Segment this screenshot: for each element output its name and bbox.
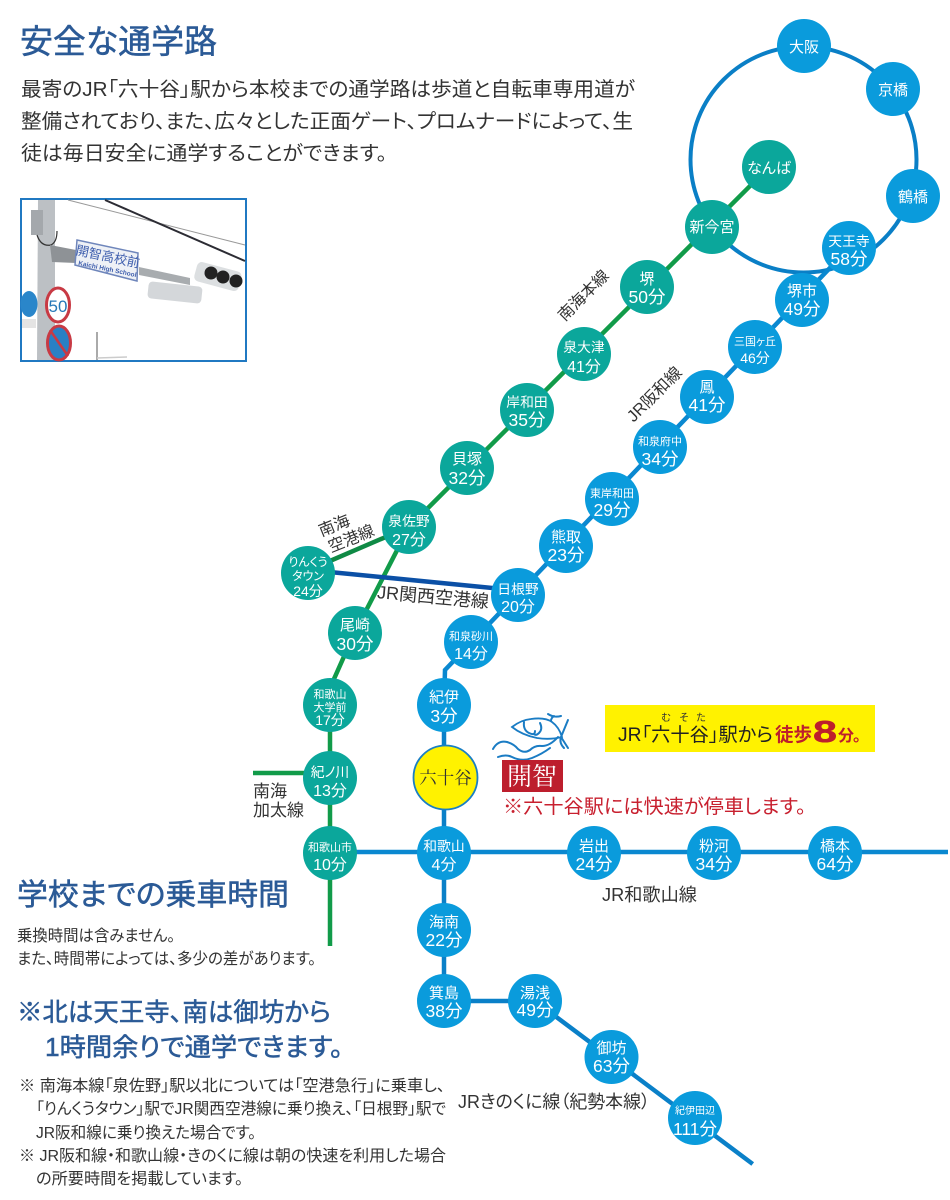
- station Wakayama: 和歌山: [423, 839, 465, 854]
- line label: Nankai airport line: 南海: [316, 512, 353, 540]
- station Wakayama University: 17分: [315, 712, 345, 728]
- logo text: Kaichi: [502, 760, 563, 792]
- station Gobo: [584, 1030, 638, 1084]
- station Minoshima: 38分: [426, 1001, 463, 1021]
- station Kinokawa: [303, 751, 357, 805]
- JR Osaka loop line ring: [690, 46, 916, 272]
- station Kii: [417, 678, 471, 732]
- station Yuasa: 湯浅: [520, 985, 550, 1002]
- photo: school crossing signal: [20, 199, 246, 361]
- station Sakaishi: 堺市: [787, 283, 817, 300]
- station Tennoji: [822, 221, 876, 275]
- intro text block: 整備されており、また、広々とした正面ゲート、プロムナードによって、生: [21, 110, 633, 133]
- station Kishiwada: 35分: [509, 410, 546, 430]
- station Sakaishi: [775, 273, 829, 327]
- station Wakayama University: 大学前: [314, 700, 346, 714]
- line label: JR Kinokuni line: JRきのくに線（紀勢本線）: [458, 1092, 650, 1112]
- station Izumiotsu: 41分: [567, 358, 601, 376]
- station Wakayama: 4分: [432, 856, 456, 874]
- station Higashikishiwada: 東岸和田: [590, 487, 634, 500]
- station Kumatori: 23分: [548, 545, 585, 565]
- station Wakayama University: 和歌山: [314, 688, 346, 701]
- station Sakai: 堺: [639, 271, 655, 288]
- station Ozaki: [328, 606, 382, 660]
- line label: JR Wakayama line: JR和歌山線: [602, 885, 697, 905]
- station Kaizuka: [440, 441, 494, 495]
- station Izumifuchu: [633, 420, 687, 474]
- station Osaka: 大阪: [789, 39, 819, 56]
- station Kyobashi: [866, 62, 920, 116]
- station Wakayama: [417, 826, 471, 880]
- station Shin-Imamiya: 新今宮: [689, 219, 735, 236]
- station Kumatori: 熊取: [551, 529, 581, 546]
- text: riding time disclaimer: 乗換時間は含みません。: [17, 927, 175, 945]
- station Ozaki: 30分: [337, 634, 374, 654]
- station Iwade: 24分: [576, 854, 613, 874]
- line label: Nankai main line: 南海本線: [555, 267, 613, 325]
- intro text block: [21, 78, 635, 165]
- station Izumisunagawa: 14分: [454, 645, 488, 663]
- station Mikunigaoka: 46分: [740, 350, 770, 366]
- station Otori: 鳳: [699, 379, 715, 396]
- station Namba: なんば: [747, 160, 791, 177]
- station Hineno: 日根野: [497, 582, 539, 597]
- line label: JR Kansai airport line: JR関西空港線: [376, 582, 490, 612]
- station Iwade: [567, 826, 621, 880]
- callout: 8-minute walk: 分: [838, 727, 854, 745]
- station Kii-Tanabe: 紀伊田辺: [675, 1104, 715, 1117]
- station Izumisunagawa: 和泉砂川: [449, 629, 493, 643]
- callout: 8-minute walk: 徒歩: [775, 724, 812, 746]
- station Kainan: 22分: [426, 930, 463, 950]
- intro text block: 最寄のJR「六十谷」駅から本校までの通学路は歩道と自転車専用道が: [21, 78, 635, 101]
- station Rinku Town: りんくう: [288, 555, 328, 569]
- station Izumisano: [382, 500, 436, 554]
- station Izumiotsu: [557, 327, 611, 381]
- station Izumifuchu: 和泉府中: [638, 434, 682, 448]
- station Kaizuka: 32分: [449, 468, 486, 488]
- JR Hanwa line: [444, 248, 849, 705]
- station Kishiwada: [500, 383, 554, 437]
- title: safe school route: 安全な通学路: [20, 23, 217, 60]
- footnotes: の所要時間を掲載しています。: [36, 1170, 243, 1188]
- station Iwade: 岩出: [579, 838, 609, 855]
- callout: 8-minute walk: た: [696, 712, 706, 724]
- station Kumatori: [539, 519, 593, 573]
- station Kaizuka: 貝塚: [452, 451, 482, 468]
- footnotes: ※ 南海本線「泉佐野」駅以北については「空港急行」に乗車し、: [19, 1076, 445, 1095]
- station Kii: 3分: [430, 706, 458, 726]
- station Shin-Imamiya: [685, 200, 739, 254]
- Nankai airport line: [309, 527, 409, 570]
- heading: riding time to school: 学校までの乗車時間: [17, 879, 289, 912]
- station Sakaishi: 49分: [784, 299, 821, 319]
- station Tsuruhashi: [886, 169, 940, 223]
- station Otori: 41分: [689, 395, 726, 415]
- callout: 8-minute walk: [605, 705, 875, 752]
- station Gobo: 御坊: [596, 1040, 627, 1057]
- station Higashikishiwada: 29分: [594, 500, 631, 520]
- heading: commute within about an hour: ※北は天王寺、南は御坊から: [17, 999, 331, 1027]
- callout: 8-minute walk: む: [661, 712, 671, 724]
- station Wakayamashi: [303, 826, 357, 880]
- photo: school crossing signal: Kaichi High School: [78, 260, 137, 279]
- station Wakayamashi: 和歌山市: [308, 841, 352, 854]
- station Namba: [742, 140, 796, 194]
- station Kii-Tanabe: 111分: [673, 1119, 718, 1139]
- line label: JR Hanwa line: JR阪和線: [623, 363, 686, 426]
- station Kokawa: 34分: [696, 854, 733, 874]
- station Kokawa: 粉河: [699, 838, 729, 855]
- station Tsuruhashi: 鶴橋: [898, 189, 928, 206]
- station Izumisunagawa: [444, 615, 498, 669]
- station Sakai: 50分: [629, 287, 666, 307]
- heading: commute within about an hour: 1時間余りで通学できます。: [45, 1034, 343, 1062]
- footnotes: JR阪和線に乗り換えた場合です。: [36, 1124, 256, 1142]
- callout: 8-minute walk: そ: [679, 712, 689, 724]
- station Kainan: [417, 903, 471, 957]
- station Kyobashi: 京橋: [878, 82, 908, 99]
- footnotes: ※ JR阪和線・和歌山線・きのくに線は朝の快速を利用した場合: [19, 1147, 446, 1165]
- JR Kansai airport line: [309, 570, 518, 590]
- note: rapid service stops at Musota: ※六十谷駅には快速が停車します。: [503, 796, 806, 818]
- station Otori: [680, 370, 734, 424]
- station Minoshima: 箕島: [429, 985, 459, 1002]
- station Izumifuchu: 34分: [642, 449, 679, 469]
- callout: 8-minute walk: 8: [813, 714, 837, 749]
- station Izumisano: 27分: [392, 531, 426, 549]
- station Rinku Town: [281, 546, 335, 600]
- stations: JR blue: [417, 19, 940, 1145]
- text: riding time disclaimer: また、時間帯によっては、多少の差があります。: [17, 950, 316, 968]
- station Higashikishiwada: [585, 472, 639, 526]
- footnotes: 「りんくうタウン」駅でJR関西空港線に乗り換え、「日根野」駅で: [36, 1100, 446, 1118]
- station Sakai: [620, 260, 674, 314]
- station Kinokawa: 紀ノ川: [311, 765, 349, 780]
- station Mikunigaoka: [728, 320, 782, 374]
- station Hineno: 20分: [501, 598, 535, 616]
- station Hineno: [491, 568, 545, 622]
- footnotes: [19, 1076, 446, 1188]
- station Kokawa: [687, 826, 741, 880]
- Nankai Kada line: [253, 771, 330, 775]
- rail network lines: [253, 46, 948, 1164]
- station Kinokawa: 13分: [313, 782, 347, 800]
- station Rinku Town: タウン: [292, 569, 325, 583]
- station Rinku Town: 24分: [293, 583, 323, 599]
- station Gobo: 63分: [593, 1056, 630, 1076]
- JR Hanwa and Kinokuni main line: [444, 705, 753, 1164]
- station Kii: 紀伊: [429, 689, 459, 706]
- heading: commute within about an hour: [17, 999, 343, 1062]
- photo: school crossing signal: 開智高校前: [75, 243, 141, 271]
- station Kainan: 海南: [429, 914, 459, 931]
- station Kii-Tanabe: [668, 1091, 722, 1145]
- intro text block: 徒は毎日安全に通学することができます。: [21, 142, 387, 165]
- station Hashimoto: [808, 826, 862, 880]
- logo: Kaichi emblem: [493, 714, 568, 760]
- station Wakayamashi: 10分: [313, 856, 347, 874]
- station Yuasa: [508, 974, 562, 1028]
- stations: Nankai teal: [281, 140, 796, 880]
- station Hashimoto: 64分: [817, 854, 854, 874]
- logo text: Kaichi: 開智: [507, 763, 557, 791]
- station Izumisano: 泉佐野: [388, 513, 430, 529]
- station Kishiwada: 岸和田: [506, 395, 548, 410]
- station Izumiotsu: 泉大津: [563, 339, 605, 355]
- station Osaka: [777, 19, 831, 73]
- station Ozaki: 尾崎: [340, 617, 370, 634]
- station Hashimoto: 橋本: [820, 838, 850, 855]
- station Yuasa: 49分: [517, 1000, 554, 1020]
- station Musota highlight: 六十谷: [419, 768, 472, 788]
- station Tennoji: 天王寺: [828, 234, 870, 249]
- station Wakayama University: [303, 678, 357, 732]
- station Musota highlight: [414, 746, 478, 810]
- line label: Nankai airport line: [316, 512, 377, 556]
- Nankai main line: [330, 167, 769, 946]
- callout: 8-minute walk: JR「六十谷」駅から: [618, 724, 773, 746]
- station Mikunigaoka: 三国ヶ丘: [734, 335, 776, 348]
- callout: 8-minute walk: 。: [853, 728, 869, 745]
- line label: Nankai Kada line: 加太線: [253, 801, 304, 820]
- line label: Nankai Kada line: 南海: [253, 782, 287, 801]
- station Minoshima: [417, 974, 471, 1028]
- station Tennoji: 58分: [831, 249, 868, 269]
- text: riding time disclaimer: [17, 927, 316, 968]
- JR Wakayama line: [330, 850, 948, 854]
- photo: school crossing signal: 50: [49, 297, 67, 316]
- line label: Nankai Kada line: [253, 782, 304, 820]
- line label: Nankai airport line: 空港線: [326, 522, 377, 556]
